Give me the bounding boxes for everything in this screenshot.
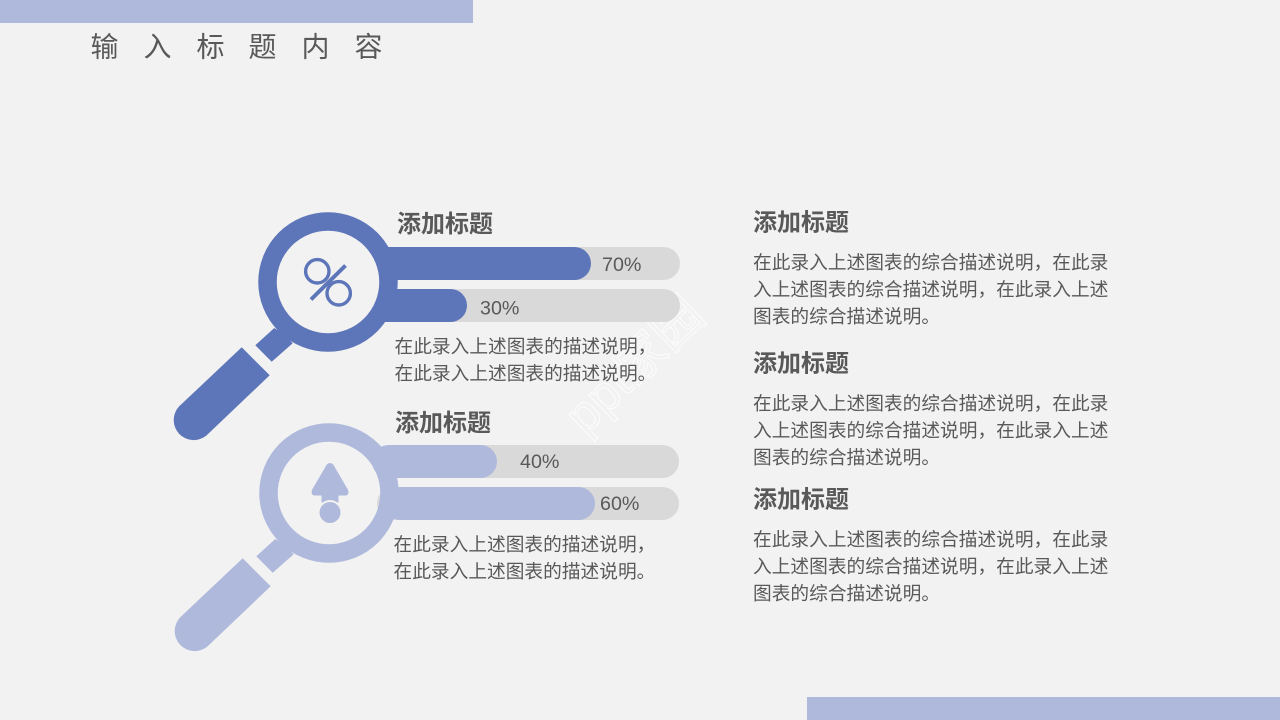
body text: 图表的综合描述说明。 (753, 306, 940, 327)
description: lower chart (394, 534, 655, 582)
bar: 60% (377, 487, 679, 520)
body text: 图表的综合描述说明。 (753, 583, 940, 604)
body text (753, 252, 1108, 327)
bar: 70% (381, 247, 680, 280)
description: lower chart: 在此录入上述图表的描述说明。 (394, 561, 655, 582)
icon: magnifier (174, 222, 388, 440)
description: upper chart: 在此录入上述图表的描述说明， (394, 336, 656, 357)
description: upper chart: 在此录入上述图表的描述说明。 (394, 363, 656, 384)
bar: 30%: 30% (480, 298, 519, 320)
bar: 30% (381, 289, 680, 322)
body text: 入上述图表的综合描述说明，在此录入上述 (753, 279, 1108, 300)
icon: magnifier (175, 432, 390, 651)
body text (753, 529, 1108, 604)
bar: 70%: 70% (602, 254, 641, 276)
text block: right column 1 (753, 210, 1108, 327)
bar: 60%: 60% (600, 493, 639, 515)
description: lower chart: 在此录入上述图表的描述说明， (394, 534, 655, 555)
title: 入 (144, 32, 172, 62)
body text: 图表的综合描述说明。 (753, 447, 940, 468)
bottom accent bar (807, 697, 1280, 720)
title: 内 (302, 32, 330, 62)
heading: 添加标题 (753, 350, 849, 378)
body text: 入上述图表的综合描述说明，在此录入上述 (753, 420, 1108, 441)
title: 题 (248, 32, 277, 62)
watermark: ppt家园 (554, 286, 715, 444)
icon: percent sign (306, 260, 350, 305)
body text: 在此录入上述图表的综合描述说明，在此录 (753, 252, 1108, 273)
title: 容 (354, 32, 383, 62)
title (90, 32, 383, 62)
title: 输 (90, 32, 119, 62)
body text: 入上述图表的综合描述说明，在此录入上述 (753, 556, 1108, 577)
panel: upper magnifier chart (174, 211, 680, 440)
heading: lower chart: 添加标题 (395, 410, 491, 437)
body text: 在此录入上述图表的综合描述说明，在此录 (753, 393, 1108, 414)
body text (753, 393, 1108, 468)
text block: right column 2 (753, 350, 1108, 468)
title: 标 (196, 32, 225, 62)
panel: lower magnifier chart (175, 410, 679, 651)
bar: 40% (372, 445, 679, 478)
heading: 添加标题 (753, 210, 849, 236)
heading: 添加标题 (753, 486, 849, 514)
bar: 40%: 40% (520, 451, 559, 473)
description: upper chart (394, 336, 656, 384)
heading: upper chart: 添加标题 (397, 211, 493, 238)
top accent bar (0, 0, 473, 23)
icon: arrow and dot (312, 464, 348, 525)
text block: right column 3 (753, 486, 1108, 604)
body text: 在此录入上述图表的综合描述说明，在此录 (753, 529, 1108, 550)
